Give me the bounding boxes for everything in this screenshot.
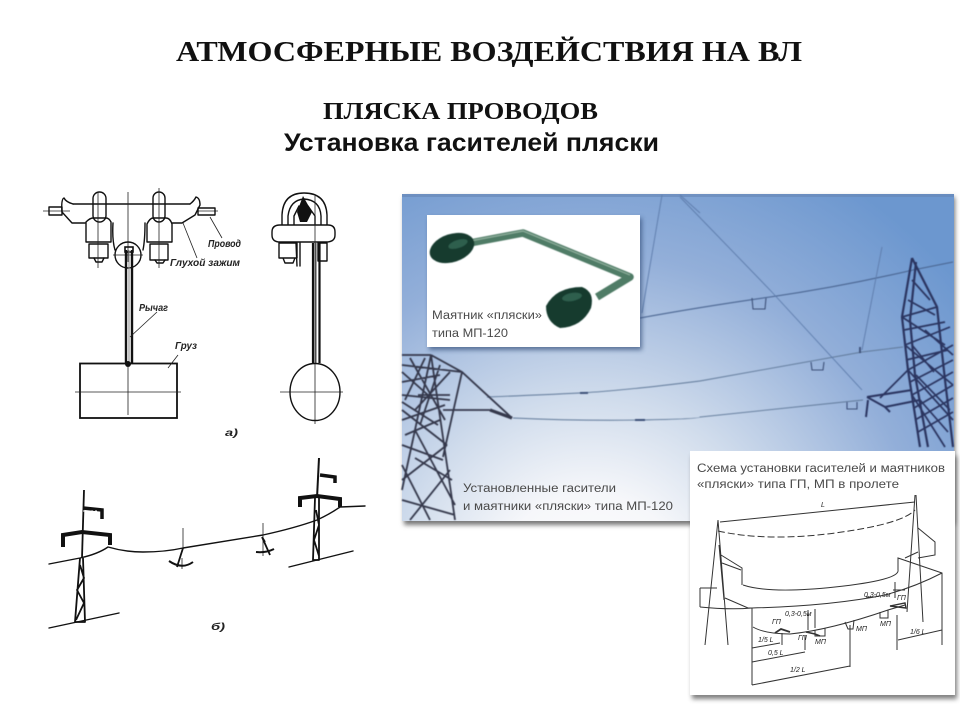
label: lever: Рычаг	[139, 302, 168, 314]
span diagram	[700, 495, 942, 685]
scheme labels: ГП	[897, 595, 907, 602]
bottom dimensions	[752, 615, 942, 685]
inset: pendulum MP-120	[426, 215, 642, 350]
scheme labels: ГП	[798, 635, 808, 642]
scheme labels: 1/6 L	[910, 629, 926, 636]
caption: pendulum type: типа МП-120	[432, 328, 508, 340]
pendulum damper 2	[256, 523, 274, 556]
scheme labels	[758, 502, 926, 674]
caption: scheme title: Схема установки гасителей и маятников	[697, 463, 945, 475]
dampers in the span	[775, 629, 790, 633]
wires and guy lines	[487, 195, 953, 420]
label: figure b: б)	[211, 621, 226, 633]
conductor	[49, 506, 365, 564]
icon: pendulum damper	[426, 228, 630, 328]
scheme labels: 0,3-0,5м	[864, 592, 891, 599]
scheme labels: 1/2 L	[790, 667, 806, 674]
subtitle: galloping of wires: ПЛЯСКА ПРОВОДОВ	[323, 98, 598, 125]
left support	[49, 490, 119, 628]
scheme labels: МП	[880, 621, 892, 628]
tower left	[402, 355, 512, 520]
dimension L	[720, 502, 915, 522]
scheme labels: МП	[856, 626, 868, 633]
caption: scheme title: «пляски» типа ГП, МП в пролете	[697, 479, 899, 491]
caption: pendulum type: Маятник «пляски»	[432, 310, 542, 322]
photo panel: installed dampers on a line	[402, 194, 955, 525]
title: АТМОСФЕРНЫЕ ВОЗДЕЙСТВИЯ НА ВЛ	[176, 35, 802, 68]
caption: installed dampers	[463, 483, 673, 513]
caption: installed dampers: Установленные гасители	[463, 483, 616, 495]
label: weight: Груз	[175, 340, 198, 352]
caption: pendulum type	[432, 310, 542, 340]
left tower	[700, 520, 752, 685]
pendulum damper 1	[169, 528, 193, 569]
scheme labels: ГП	[772, 619, 782, 626]
scheme labels: МП	[815, 639, 827, 646]
tower right	[866, 258, 953, 447]
technical drawing a: damper side view	[272, 193, 343, 424]
right support	[289, 458, 353, 567]
scheme labels: 1/5 L	[758, 637, 774, 644]
label: wire: Провод	[208, 238, 241, 250]
small dampers on the wires	[580, 298, 860, 420]
caption: scheme title	[697, 463, 945, 491]
label: dead-end clamp: Глухой зажим	[170, 257, 240, 269]
right tower	[898, 495, 942, 645]
label: figure a: а)	[225, 427, 239, 439]
inset: installation scheme	[690, 451, 957, 699]
leader lines	[130, 217, 222, 368]
scheme labels: 0,3-0,5м	[785, 611, 812, 618]
conductors	[743, 570, 898, 590]
technical drawing a: damper front view	[43, 188, 241, 439]
subtitle: installing dampers: Установка гасителей пляски	[284, 129, 659, 157]
caption: installed dampers: и маятники «пляски» типа МП-120	[463, 501, 673, 513]
scheme labels: L	[821, 502, 825, 509]
technical drawing b: line span with dampers	[49, 458, 365, 633]
scheme labels: 0,5 L	[768, 650, 784, 657]
